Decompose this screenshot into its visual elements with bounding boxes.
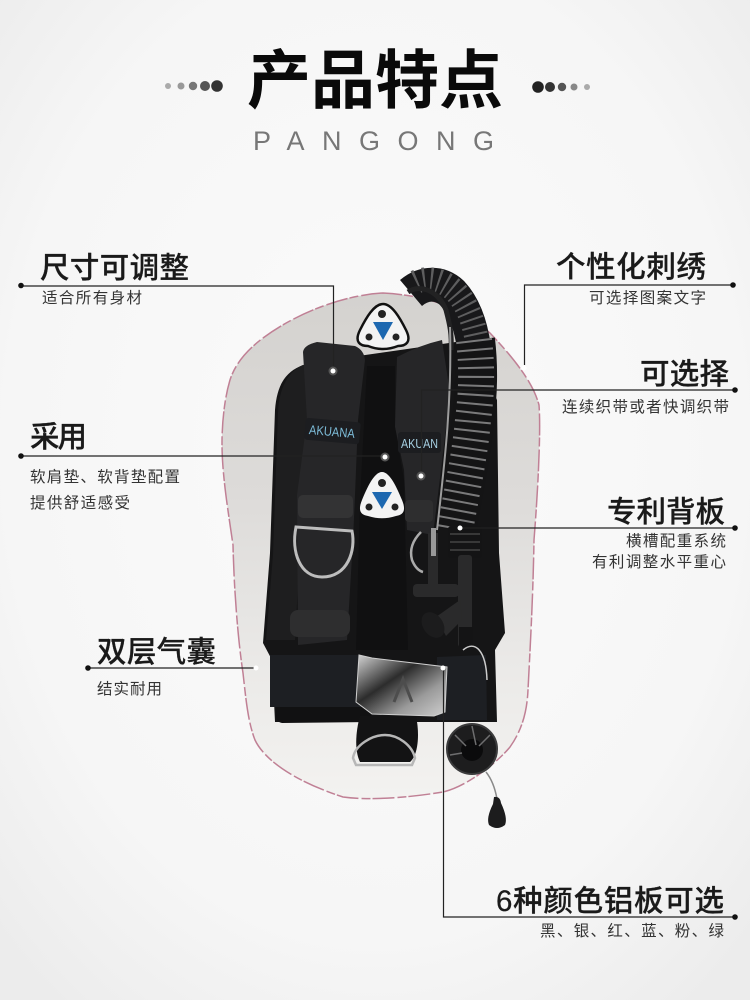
AKUANA label left bbox=[304, 418, 361, 444]
callout: six plate colours bbox=[440, 666, 738, 940]
AKUANA label right bbox=[398, 432, 441, 453]
callout: patent backplate bbox=[458, 496, 738, 571]
callout: embroidery bbox=[522, 251, 736, 370]
callout: embroidery: 个性化刺绣 bbox=[556, 251, 706, 284]
callout: patent backplate: 横槽配重系统 bbox=[626, 532, 726, 550]
title dots left bbox=[165, 80, 223, 92]
title dots right bbox=[532, 81, 590, 93]
callout: size adjust: 适合所有身材 bbox=[42, 289, 142, 307]
callout: dual bladder: 双层气囊 bbox=[97, 636, 216, 669]
lower D-ring bbox=[353, 716, 418, 765]
callout: size adjust bbox=[18, 252, 337, 376]
dump valve bbox=[447, 724, 497, 774]
waist belt left bbox=[270, 655, 362, 707]
callout: padding bbox=[18, 421, 389, 512]
callout: size adjust: 尺寸可调整 bbox=[40, 252, 189, 285]
callout: patent backplate: 有利调整水平重心 bbox=[592, 553, 726, 571]
waist belt right bbox=[437, 655, 487, 720]
title: 产品特点 bbox=[247, 45, 503, 117]
chest pad bbox=[298, 495, 353, 518]
callout: six plate colours: 黑、银、红、蓝、粉、绿 bbox=[540, 922, 724, 940]
right shoulder strap bbox=[395, 340, 450, 535]
left D-ring bbox=[295, 527, 353, 577]
corrugated hose bbox=[408, 279, 478, 530]
backpack body bbox=[263, 340, 505, 722]
callout: six plate colours: 6种颜色铝板可选 bbox=[496, 885, 724, 918]
AKUANA label right: AKUAN bbox=[401, 436, 438, 451]
left body padding bbox=[266, 365, 309, 640]
callout: webbing option bbox=[416, 358, 738, 480]
AKUANA label left: AKUANA bbox=[308, 422, 356, 441]
metal hose rod bbox=[437, 327, 450, 530]
callout: padding: 提供舒适感受 bbox=[30, 494, 130, 512]
weight belt buckle bbox=[356, 655, 447, 716]
callout: dual bladder: 结实耐用 bbox=[97, 680, 162, 698]
belt underside bbox=[276, 707, 372, 723]
left shoulder strap bbox=[297, 342, 365, 645]
callout: padding: 软肩垫、软背垫配置 bbox=[30, 468, 180, 486]
logo top bbox=[358, 304, 408, 349]
pull toggle bbox=[488, 797, 506, 828]
callout: webbing option: 连续织带或者快调织带 bbox=[562, 398, 729, 416]
inflated bladder bbox=[222, 293, 540, 799]
inflator valve bbox=[413, 526, 482, 647]
callout: patent backplate: 专利背板 bbox=[607, 496, 725, 529]
callout: embroidery: 可选择图案文字 bbox=[589, 289, 706, 307]
callout: webbing option: 可选择 bbox=[640, 358, 729, 391]
callout: padding: 采用 bbox=[30, 421, 87, 454]
lower strap pad bbox=[290, 610, 350, 637]
logo lower bbox=[360, 472, 404, 518]
right chest pad bbox=[405, 500, 433, 522]
center back panel bbox=[356, 366, 408, 650]
hose tail wire bbox=[463, 646, 487, 680]
small right D-ring bbox=[411, 532, 423, 572]
callout: dual bladder bbox=[85, 636, 258, 698]
subtitle: PANGONG: PANGONG bbox=[253, 126, 494, 156]
pull cord bbox=[486, 772, 497, 799]
